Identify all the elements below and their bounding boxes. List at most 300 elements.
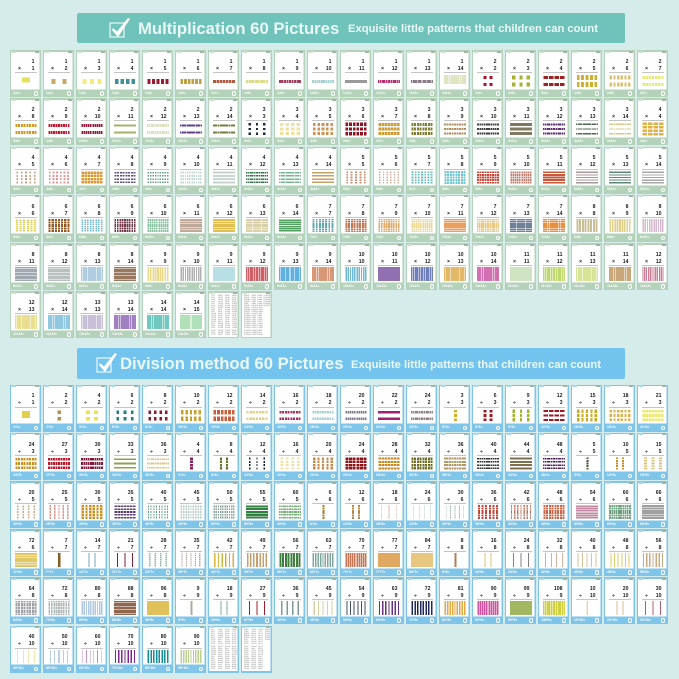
answer table 1: 40÷5=8 xyxy=(225,638,229,639)
answer table 2: 36÷6=6 xyxy=(251,659,256,660)
card 27÷9: 9 xyxy=(263,593,266,599)
answer table 2: 4×12=48 xyxy=(251,310,257,311)
card 7÷7: ÷ xyxy=(51,545,54,551)
card 5x6: 5x6= xyxy=(376,187,383,191)
card 50÷5 xyxy=(208,481,239,528)
card 40÷4: 40÷4= xyxy=(475,473,484,477)
card 1x3 xyxy=(76,50,107,97)
card 9x14 xyxy=(307,243,338,290)
answer table 1: 12÷6=2 xyxy=(225,651,229,652)
answer table 2: 12×14=168 xyxy=(263,298,270,299)
card 20÷2 xyxy=(340,385,371,432)
card 4÷2 xyxy=(76,385,107,432)
card 4x7: × xyxy=(84,162,87,168)
card 9x14: 14 xyxy=(326,259,332,265)
answer table 1: 16÷2=8 xyxy=(211,646,215,648)
answer table 1: 35÷7=5 xyxy=(232,640,236,641)
card 16÷4 xyxy=(274,433,305,480)
card 8÷8: ÷ xyxy=(447,545,450,551)
card 6x12 xyxy=(208,195,239,242)
card 3x14: 14 xyxy=(623,114,628,120)
card 8x14: 14 xyxy=(128,259,134,265)
answer table 1: 8÷4=2 xyxy=(218,642,222,643)
card 60÷5: 60 xyxy=(293,490,298,496)
card 32÷4: ÷ xyxy=(414,449,417,455)
card 3x12: × xyxy=(546,114,549,120)
answer table 2: 4×7=28 xyxy=(251,300,256,301)
card 14÷2: ÷ xyxy=(249,400,252,406)
card 49÷7: 7 xyxy=(263,545,266,551)
answer table 2: 7×7=49 xyxy=(257,314,262,315)
card 9x14: × xyxy=(315,259,318,265)
card 5x7: 7 xyxy=(428,162,430,168)
card 2÷2: ÷ xyxy=(51,400,54,406)
card 12x12: × xyxy=(645,259,648,265)
answer table 2: 27÷9=3 xyxy=(244,644,248,645)
answer table 1: 32÷4=8 xyxy=(218,655,222,656)
card 27÷9: ÷ xyxy=(249,593,252,599)
card 90÷10 xyxy=(175,626,206,673)
card 28÷7: 7 xyxy=(164,545,166,551)
card 3÷3: 3÷3= xyxy=(442,425,449,429)
answer table 2: 4×9=36 xyxy=(251,304,256,305)
answer table 2: 56÷8=7 xyxy=(258,669,263,670)
card 2x12: 12 xyxy=(161,114,166,120)
card 4÷2: ÷ xyxy=(84,400,87,406)
card 25÷5: 25÷5= xyxy=(46,522,55,526)
answer table 2: 90÷9=10 xyxy=(244,659,249,660)
card 54÷6: 54 xyxy=(590,490,596,496)
card 40÷4: 40 xyxy=(491,442,496,448)
card 3x5: 5 xyxy=(329,114,332,120)
card 3x10: 3x10= xyxy=(475,139,484,143)
card 50÷5: 5 xyxy=(230,497,232,503)
answer table 1: 3×9=27 xyxy=(218,322,222,323)
card 3x10: × xyxy=(480,114,483,120)
card 5x8: 8 xyxy=(461,162,464,168)
card 80÷10: 80 xyxy=(161,634,166,640)
card 1x8: 8 xyxy=(263,66,266,72)
card 56÷8: 56÷8= xyxy=(640,570,649,574)
answer table 2: 63÷9=7 xyxy=(244,653,248,654)
card 55÷5: 55÷5= xyxy=(244,522,253,526)
card 3x4 xyxy=(274,98,305,145)
card 4÷4: ÷ xyxy=(183,449,186,455)
card 1x3: 1 xyxy=(98,59,100,65)
card 3x10: 3 xyxy=(494,107,496,113)
card 5x13: 13 xyxy=(623,162,628,168)
card 3x11 xyxy=(505,98,536,145)
answer table 1: 7×14=98 xyxy=(232,328,237,329)
card 70÷10: 70÷10= xyxy=(112,666,123,670)
answer table 1: 1×1=1 xyxy=(211,296,215,297)
card 18÷3: 3 xyxy=(626,400,628,406)
card 20÷5: 5 xyxy=(32,497,34,503)
card 42÷7: 42 xyxy=(227,538,232,544)
answer table 1: 2×7=14 xyxy=(211,335,215,336)
card 7x14: 14 xyxy=(557,211,562,217)
card 48÷8 xyxy=(604,529,635,576)
answer table 1: 42÷6=7 xyxy=(225,661,229,662)
card 6x8: 8 xyxy=(98,211,100,217)
card 4÷4: 4÷4= xyxy=(178,473,185,477)
card 1÷1: ÷ xyxy=(18,400,21,406)
card 2x2: 2 xyxy=(494,66,496,72)
card 8x8: × xyxy=(579,211,582,217)
card 36÷6: 36÷6= xyxy=(475,522,484,526)
answer table 1: 3×7=21 xyxy=(218,318,222,319)
card 18÷9: ÷ xyxy=(216,593,219,599)
card 18÷9: 18÷9= xyxy=(211,618,220,622)
card 80÷8: 80 xyxy=(95,586,100,592)
card 10x14: 10x14= xyxy=(475,284,486,288)
card 108÷9: ÷ xyxy=(546,593,549,599)
card 18÷2: 18÷2= xyxy=(310,425,319,429)
answer table 1: 4÷2=2 xyxy=(211,634,215,635)
answer table 2: 7×12=84 xyxy=(257,324,263,325)
card 81÷9: 81 xyxy=(458,586,464,592)
card 28÷7: 28 xyxy=(161,538,166,544)
card 16÷2 xyxy=(274,385,305,432)
card 36÷4: 36÷4= xyxy=(442,473,451,477)
answer table 1: 42÷7=6 xyxy=(232,642,236,643)
card 7÷7: 7 xyxy=(65,538,68,544)
card 8x14: 8 xyxy=(131,252,134,258)
card 48÷8: 48÷8= xyxy=(607,570,616,574)
card 9x10: 9x10= xyxy=(178,284,187,288)
answer table 1: 14÷7=2 xyxy=(232,634,236,635)
card 6x7: 6x7= xyxy=(46,235,53,239)
card 36÷4 xyxy=(439,433,470,480)
answer table 2: 5×12=60 xyxy=(251,331,257,332)
card 8x12: 12 xyxy=(62,259,68,265)
card 5÷5: 5 xyxy=(593,449,596,455)
answer table 1: 21÷7=3 xyxy=(232,636,236,637)
answer table 2: 25÷5=5 xyxy=(251,632,256,633)
card 10÷2 xyxy=(175,385,206,432)
card 22÷2: 2 xyxy=(395,400,398,406)
answer table 2: 7×11=77 xyxy=(257,322,262,323)
card 12÷3: ÷ xyxy=(546,400,549,406)
answer table 2: 8×13=104 xyxy=(244,300,250,301)
card 3x12: 3 xyxy=(560,107,562,113)
card 11x13: 11 xyxy=(590,252,596,258)
card 2x4: × xyxy=(546,66,549,72)
card 14÷7: 14÷7= xyxy=(79,570,88,574)
card 9x11: 11 xyxy=(227,259,232,265)
answer table 1: 4×7=28 xyxy=(225,300,229,301)
card 1x9: 9 xyxy=(296,66,298,72)
card 8÷2 xyxy=(142,385,173,432)
card 6÷3: ÷ xyxy=(480,400,483,406)
card 3x7: 3 xyxy=(395,107,398,113)
answer table 2: 14×15=210 xyxy=(263,306,270,307)
answer table 2: 4×10=40 xyxy=(251,306,257,307)
card 72÷9: 72 xyxy=(425,586,430,592)
card 10x12 xyxy=(406,243,437,290)
card 3x10 xyxy=(472,98,503,145)
card 8x12 xyxy=(43,243,74,290)
card 10x13: 10 xyxy=(458,252,464,258)
card 18÷6: 18÷6= xyxy=(376,522,385,526)
answer table 1: 15÷5=3 xyxy=(218,669,222,670)
card 7x11: 11 xyxy=(458,211,464,217)
card 7x9: 7 xyxy=(395,204,398,210)
card 7÷7: 7 xyxy=(65,545,68,551)
card 45÷9: ÷ xyxy=(315,593,318,599)
card 5x11: 11 xyxy=(557,162,562,168)
answer table 2: 40÷5=8 xyxy=(251,638,256,639)
answer table 2: 48÷6=8 xyxy=(251,663,256,664)
card 8x10: × xyxy=(645,211,648,217)
card 63÷9 xyxy=(373,577,404,624)
card 10÷5: 5 xyxy=(626,449,628,455)
card 4x12 xyxy=(241,147,272,194)
card 8x8: 8 xyxy=(593,211,596,217)
card 2x5: 2x5= xyxy=(574,91,581,95)
card 9x9: × xyxy=(150,259,153,265)
card 1x5: 1 xyxy=(164,59,166,65)
answer table 1: 1×6=6 xyxy=(211,306,215,307)
card 4x12: 12 xyxy=(260,162,266,168)
card 11x13 xyxy=(571,243,602,290)
card 2x8: 2 xyxy=(32,107,34,113)
answer table 1: 5÷5=1 xyxy=(218,665,222,666)
card 11x11: 11 xyxy=(524,252,530,258)
card 18÷3: 18 xyxy=(623,393,628,399)
card 54÷9 xyxy=(340,577,371,624)
answer table 2: 9×13=117 xyxy=(244,312,250,313)
card 1x5 xyxy=(142,50,173,97)
answer table 1: 8÷8=1 xyxy=(232,657,236,658)
card 80÷8: ÷ xyxy=(84,593,87,599)
answer table 1: 16÷8=2 xyxy=(232,659,236,660)
card 48÷6: 48 xyxy=(557,490,562,496)
card 2x14: 2 xyxy=(230,107,232,113)
card 6x13 xyxy=(241,195,272,242)
answer table 1: 7×11=77 xyxy=(232,322,237,323)
card 15÷3: ÷ xyxy=(579,400,582,406)
card 30÷6: 30÷6= xyxy=(442,522,451,526)
card 27÷3 xyxy=(43,433,74,480)
card 42÷7: 7 xyxy=(230,545,232,551)
card 16÷8 xyxy=(472,529,503,576)
answer table 2: 8÷8=1 xyxy=(258,657,262,658)
answer table 1: 7×13=91 xyxy=(232,326,237,327)
card 14x15: × xyxy=(183,307,186,313)
card 12x12: 12 xyxy=(656,259,662,265)
card 88÷8 xyxy=(109,577,140,624)
card 21÷7: 21÷7= xyxy=(112,570,121,574)
card 3x9: 3x9= xyxy=(442,139,449,143)
card 90÷9 xyxy=(472,577,503,624)
card 12x12 xyxy=(637,243,668,290)
card 33÷3: 33÷3= xyxy=(112,473,121,477)
card 20÷10: ÷ xyxy=(612,593,615,599)
card 54÷9: ÷ xyxy=(348,593,351,599)
card 18÷9: 18 xyxy=(227,586,232,592)
card 60÷6: 60÷6= xyxy=(607,522,616,526)
card 25÷5: 5 xyxy=(65,497,68,503)
answer table 2: 16÷8=2 xyxy=(258,659,263,660)
card 99÷9: ÷ xyxy=(513,593,516,599)
card 4x5 xyxy=(10,147,41,194)
card 3x12: 3x12= xyxy=(541,139,550,143)
card 2x14: 14 xyxy=(227,114,232,120)
card 48÷4: ÷ xyxy=(546,449,549,455)
card 6÷2: 2 xyxy=(131,400,134,406)
card 3x4: 3 xyxy=(296,107,298,113)
card 5x14: × xyxy=(645,162,648,168)
card 7x9: 7x9= xyxy=(376,235,383,239)
card 30÷10: 30÷10= xyxy=(640,618,651,622)
card 56÷8 xyxy=(637,529,668,576)
card 12x14 xyxy=(43,291,74,338)
answer table 2: 10×11=110 xyxy=(244,318,250,319)
card 7x14: 7 xyxy=(560,204,562,210)
card 3x5: 3x5= xyxy=(310,139,317,143)
card 1x13: 1 xyxy=(428,59,430,65)
card 2x13 xyxy=(175,98,206,145)
answer table 1: 4×14=56 xyxy=(225,314,230,315)
card 15÷5: ÷ xyxy=(645,449,648,455)
card 48÷4: 48 xyxy=(557,442,562,448)
answer table 1: 14÷2=7 xyxy=(211,644,215,645)
answer table 1: 3×3=9 xyxy=(218,310,222,311)
answer table 2: 6×11=66 xyxy=(257,306,262,307)
card 4x9: 4 xyxy=(164,155,166,161)
card 33÷3: 3 xyxy=(131,449,134,455)
answer table 2: 14÷7=2 xyxy=(258,634,263,635)
card 6x12: 6 xyxy=(230,204,232,210)
card 3x9: 9 xyxy=(461,114,464,120)
card 12÷6: 6 xyxy=(362,497,364,503)
card 24÷4 xyxy=(340,433,371,480)
card 99÷9: 99÷9= xyxy=(508,618,517,622)
answer table 1: 2×5=10 xyxy=(211,331,215,332)
card 4x14: × xyxy=(315,162,318,168)
answer table 1: 4×6=24 xyxy=(225,298,229,299)
card 16÷2: ÷ xyxy=(282,400,285,406)
answer table 1: 7×8=56 xyxy=(232,316,236,317)
card 88÷8: 88 xyxy=(128,586,134,592)
card 5x6: 5 xyxy=(395,155,398,161)
card 21÷7: 21 xyxy=(128,538,134,544)
card 3x3: × xyxy=(249,114,252,120)
card 4x8: 4x8= xyxy=(112,187,119,191)
card 1x11: × xyxy=(348,66,351,72)
card 24÷3: 24÷3= xyxy=(13,473,22,477)
answer table 1: 6×13=78 xyxy=(232,310,237,311)
answer table 1: 5×13=65 xyxy=(225,333,230,334)
card 8x13 xyxy=(76,243,107,290)
card 1x9 xyxy=(274,50,305,97)
card 6x12: 6x12= xyxy=(211,235,220,239)
card 2x7: × xyxy=(645,66,648,72)
card 32÷8: 32÷8= xyxy=(541,570,550,574)
answer table 1: 5×6=30 xyxy=(225,318,229,319)
card 10÷2: 2 xyxy=(197,400,200,406)
card 16÷8: ÷ xyxy=(480,545,483,551)
card 10÷5: 10÷5= xyxy=(607,473,616,477)
card 3x14: × xyxy=(612,114,615,120)
answer table 2: 36÷9=4 xyxy=(244,646,248,648)
card 2x14 xyxy=(208,98,239,145)
answer table 1: 6×10=60 xyxy=(232,304,237,305)
card 21÷7: 7 xyxy=(131,545,134,551)
card 44÷4: ÷ xyxy=(513,449,516,455)
card 70÷7: ÷ xyxy=(348,545,351,551)
card 28÷4: 28÷4= xyxy=(376,473,385,477)
card 3x14: 3x14= xyxy=(607,139,616,143)
answer table 2: 5×13=65 xyxy=(251,333,257,334)
card 18÷3: ÷ xyxy=(612,400,615,406)
answer table 1: 1×12=12 xyxy=(211,318,216,319)
card 14x15 xyxy=(175,291,206,338)
card 2÷2: 2 xyxy=(65,400,68,406)
card 40÷5: 40 xyxy=(161,490,166,496)
card 2x8: 8 xyxy=(32,114,34,120)
card 9x13: × xyxy=(282,259,285,265)
answer table 2: 72÷9=8 xyxy=(244,655,248,656)
card 24÷8: 8 xyxy=(527,545,530,551)
card 12÷3: 12 xyxy=(557,393,562,399)
card 24÷4: ÷ xyxy=(348,449,351,455)
answer table 1: 2×10=20 xyxy=(218,300,223,301)
card 14x14: 14 xyxy=(161,300,166,306)
card 35÷7: 35 xyxy=(194,538,200,544)
card 21÷3: 21÷3= xyxy=(640,425,649,429)
card 6x10: 6x10= xyxy=(145,235,154,239)
card 24÷2: 2 xyxy=(428,400,430,406)
card 10x13: × xyxy=(447,259,450,265)
answer table 2: 42÷7=6 xyxy=(258,642,263,643)
card 7x13 xyxy=(505,195,536,242)
card 3x7: 7 xyxy=(395,114,398,120)
answer table 1: 1÷1=1 xyxy=(211,630,215,631)
card 10x10: 10 xyxy=(359,252,364,258)
card 7x8: 7 xyxy=(362,204,364,210)
answer table 1: 49÷7=7 xyxy=(232,644,236,645)
card 12÷4: 4 xyxy=(263,449,266,455)
answer table 1: 50÷5=10 xyxy=(225,642,230,643)
card 2x3: 3 xyxy=(527,66,530,72)
card 5x7: 5 xyxy=(428,155,430,161)
card 3x6: × xyxy=(348,114,351,120)
card 88÷8: 88÷8= xyxy=(112,618,121,622)
card 7x12: 12 xyxy=(491,211,496,217)
card 28÷4 xyxy=(373,433,404,480)
card 3÷3: ÷ xyxy=(447,400,450,406)
card 1x6: 1 xyxy=(197,59,200,65)
answer table 1: 55÷5=11 xyxy=(225,644,230,645)
card 30÷5: 30÷5= xyxy=(79,522,88,526)
card 21÷3: 21 xyxy=(656,393,662,399)
card 10÷10: 10÷10= xyxy=(574,618,585,622)
card 2x3: 2x3= xyxy=(508,91,515,95)
card 45÷5: ÷ xyxy=(183,497,186,503)
card 3x3: 3x3= xyxy=(244,139,251,143)
card 1x13: 1x13= xyxy=(409,91,418,95)
card 4x14 xyxy=(307,147,338,194)
card 25÷5 xyxy=(43,481,74,528)
card 5x12: 12 xyxy=(590,162,596,168)
card 8÷2: 8÷2= xyxy=(145,425,152,429)
card 6x6: 6 xyxy=(32,204,34,210)
card 5x9 xyxy=(472,147,503,194)
answer table 1: 1×4=4 xyxy=(211,302,215,303)
card 90÷10: ÷ xyxy=(183,641,186,647)
